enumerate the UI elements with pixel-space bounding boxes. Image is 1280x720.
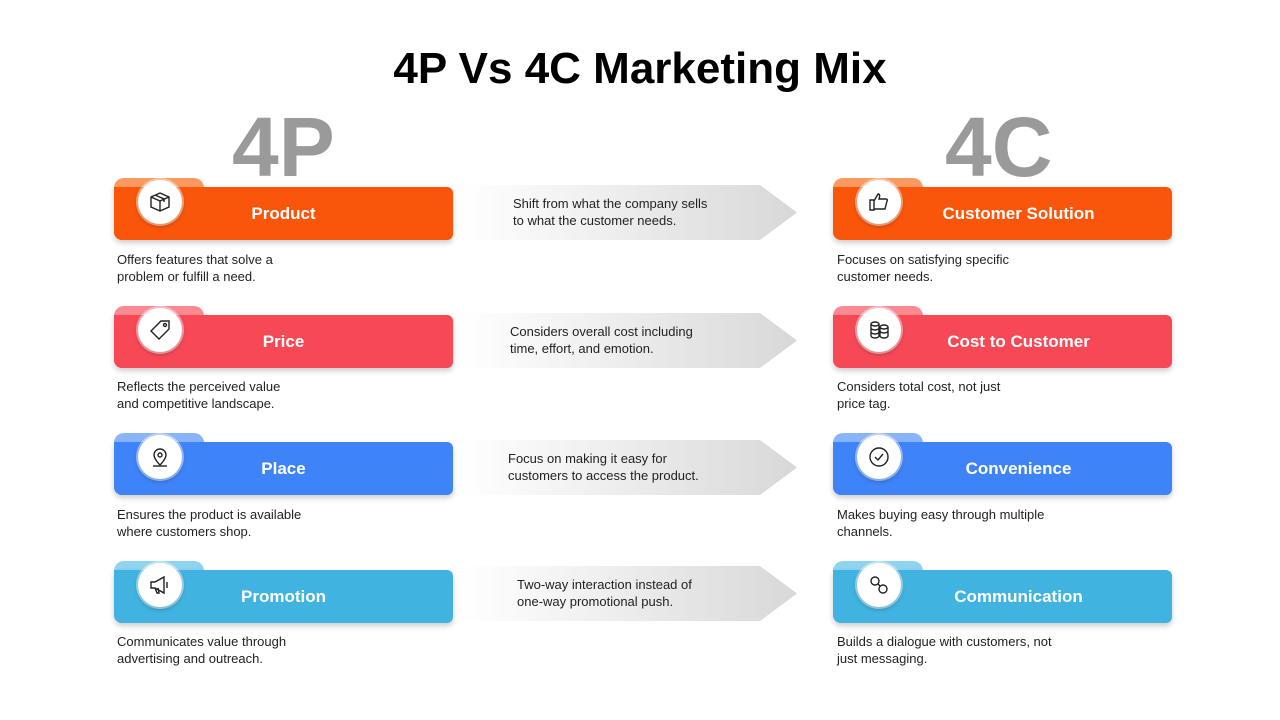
desc: Place <box>117 507 301 539</box>
row 2 right: Cost to Customer: Cost to Customer <box>947 332 1090 351</box>
desc: Price: and competitive landscape. <box>117 396 275 411</box>
desc: Communication <box>836 634 1052 666</box>
desc: Convenience: channels. <box>837 524 893 539</box>
arrow 2: Considers overall cost including <box>510 324 693 339</box>
desc: Customer Solution <box>837 252 1009 284</box>
icon: link <box>857 563 901 607</box>
arrow 1 <box>513 185 797 240</box>
desc: Cost to Customer: Considers total cost, not just <box>837 379 1000 394</box>
desc: Place: where customers shop. <box>117 524 251 539</box>
arrow 4: Two-way interaction instead of <box>517 577 692 592</box>
desc: Customer Solution: Focuses on satisfying specific <box>837 252 1009 267</box>
row 4 left: Promotion: Promotion <box>241 587 326 606</box>
desc: Price: Reflects the perceived value <box>117 379 280 394</box>
row 3 left: Place: Place <box>261 459 306 478</box>
desc: Product: problem or fulfill a need. <box>117 269 256 284</box>
row 2 left: Price <box>112 306 456 374</box>
icon: check <box>857 435 901 479</box>
desc: Place: Ensures the product is available <box>117 507 301 522</box>
row 3 right: Convenience: Convenience <box>966 459 1071 478</box>
arrow 3: customers to access the product. <box>508 468 699 483</box>
row 1 left: Product <box>112 178 456 246</box>
arrow 2: time, effort, and emotion. <box>510 341 654 356</box>
desc: Promotion: Communicates value through <box>117 634 286 649</box>
icon: megaphone <box>138 563 182 607</box>
icon: box <box>138 180 182 224</box>
arrow 1: to what the customer needs. <box>513 213 676 228</box>
desc: Communication: just messaging. <box>837 651 927 666</box>
arrow 3 <box>508 440 797 495</box>
desc: Communication: Builds a dialogue with customers, not <box>837 634 1052 649</box>
row 1 left: Product: Product <box>251 204 316 223</box>
desc: Promotion: advertising and outreach. <box>117 651 263 666</box>
row 2 right: Cost to Customer <box>830 306 1174 374</box>
desc: Convenience <box>837 507 1044 539</box>
arrow 1: Shift from what the company sells <box>513 196 707 211</box>
arrow 4 <box>517 566 797 621</box>
desc: Product <box>117 252 273 284</box>
desc: Customer Solution: customer needs. <box>837 269 933 284</box>
desc: Price <box>117 379 280 411</box>
icon: tag <box>138 308 182 352</box>
heading: 4P: 4P <box>232 100 335 194</box>
icon: location pin <box>138 435 182 479</box>
row 4 left: Promotion <box>112 561 456 628</box>
desc: Cost to Customer: price tag. <box>837 396 890 411</box>
icon: thumbs up <box>857 180 901 224</box>
arrow 4: one-way promotional push. <box>517 594 673 609</box>
row 1 right: Customer Solution <box>830 178 1174 246</box>
row 4 right: Communication <box>830 561 1174 628</box>
row 2 left: Price: Price <box>263 332 304 351</box>
heading: 4C: 4C <box>945 100 1052 194</box>
desc: Cost to Customer <box>837 379 1000 411</box>
row 1 right: Customer Solution: Customer Solution <box>942 204 1095 223</box>
desc: Product: Offers features that solve a <box>117 252 273 267</box>
arrow 3: Focus on making it easy for <box>508 451 667 466</box>
title: 4P Vs 4C Marketing Mix <box>393 44 887 93</box>
icon: coins <box>857 308 901 352</box>
row 3 left: Place <box>112 433 456 500</box>
row 4 right: Communication: Communication <box>954 587 1083 606</box>
arrow 2 <box>510 313 797 368</box>
row 3 right: Convenience <box>830 433 1174 500</box>
desc: Promotion <box>117 634 286 666</box>
desc: Convenience: Makes buying easy through multiple <box>837 507 1044 522</box>
